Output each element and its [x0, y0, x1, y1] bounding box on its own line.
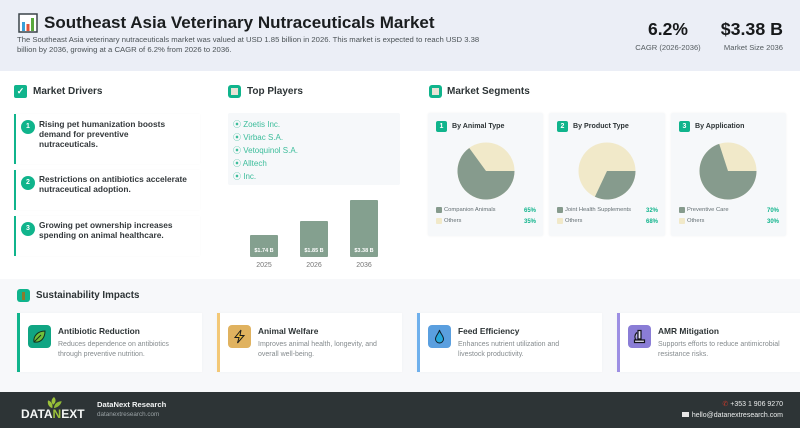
legend value: 32% [646, 208, 658, 214]
pie chart [700, 142, 756, 200]
footer [0, 392, 800, 428]
driver 1 text: Rising pet humanization boosts [39, 119, 165, 129]
panel: sustainability impacts [0, 279, 800, 392]
company name: DataNext Research [97, 400, 166, 409]
legend swatch [557, 207, 563, 213]
segment card: by application [671, 113, 786, 236]
player list [228, 113, 400, 185]
company website: datanextresearch.com [97, 411, 159, 418]
number 2 [21, 176, 35, 190]
header band [0, 0, 800, 71]
panel: market segments [429, 85, 530, 98]
segment card: by animal type [428, 113, 543, 236]
card text [658, 340, 780, 358]
panel: top players [228, 85, 400, 269]
card title: Antibiotic Reduction [58, 326, 140, 336]
number 3: 3 [26, 225, 30, 232]
panel: market drivers [14, 85, 187, 256]
driver 1 text: demand for preventive [39, 129, 128, 139]
card title: Animal Welfare [258, 326, 318, 336]
heading: top players: Top Players [247, 86, 303, 96]
badge 2 [557, 121, 568, 132]
badge 3: 3 [683, 123, 686, 130]
driver 3 text [39, 220, 173, 240]
legend label: Joint Health Supplements [565, 207, 631, 213]
number 2: 2 [26, 179, 30, 186]
legend value: 30% [767, 219, 779, 225]
card text: Supports efforts to reduce antimicrobial [658, 341, 780, 348]
driver 1 text [39, 119, 165, 149]
impact card: animal welfare [217, 313, 402, 372]
heading: sustainability impacts: Sustainability Impacts [36, 290, 139, 301]
stat: CAGR [635, 19, 701, 52]
legend swatch [679, 218, 685, 224]
segment card: by product type [549, 113, 665, 236]
heading: market segments: Market Segments [447, 86, 530, 96]
legend value: 35% [524, 219, 536, 225]
description [17, 35, 479, 54]
driver 2 text: Restrictions on antibiotics accelerate [39, 174, 187, 184]
icon: check [14, 85, 27, 98]
driver 2 [14, 170, 200, 210]
legend label: Others [444, 218, 461, 224]
bar 2025 [250, 235, 278, 257]
year 2025: 2025 [256, 262, 272, 269]
card title: AMR Mitigation [658, 326, 719, 336]
card text: livestock productivity. [458, 350, 524, 358]
bar 2026 [300, 221, 328, 257]
player: Inc.: ⦿ Inc. [233, 172, 256, 181]
stat: market size: $3.38 B [721, 19, 783, 39]
icon: seedling [17, 289, 30, 302]
driver 2 text: nutraceutical adoption. [39, 184, 131, 194]
legend value: 65% [524, 208, 536, 214]
driver 1 text: nutraceuticals. [39, 139, 98, 149]
impact card: antibiotic reduction [17, 313, 202, 372]
player: Vetoquinol: ⦿ Vetoquinol S.A. [233, 146, 298, 155]
title: Southeast Asia Veterinary Nutraceuticals Market [44, 13, 435, 32]
stat: CAGR: CAGR (2026-2036) [635, 43, 701, 52]
card title: By Animal Type [452, 122, 504, 130]
driver 3 [14, 216, 200, 256]
stat: market size: Market Size 2036 [724, 43, 783, 52]
bar chart [250, 200, 378, 269]
logo: DataNext [21, 397, 85, 421]
icon: water drop [428, 325, 451, 348]
year 2026: 2026 [306, 262, 322, 269]
number 1: 1 [26, 123, 30, 130]
logo wordmark: DATANEXT [21, 407, 85, 421]
impact card: feed efficiency [417, 313, 602, 372]
card text: resistance risks. [658, 350, 708, 358]
icon: microscope [628, 325, 651, 348]
number 1 [21, 120, 35, 134]
legend label: Others [565, 218, 582, 224]
legend swatch [436, 207, 442, 213]
stat: market size [721, 19, 783, 52]
legend value: 68% [646, 219, 658, 225]
description: billion by 2036, growing at a CAGR of 6.2% from 2026 to 2036. [17, 45, 232, 54]
description: The Southeast Asia veterinary nutraceuticals market was valued at USD 1.85 billion in 2026. This market is expected to reach USD 3.38 [17, 35, 479, 44]
heading: market drivers: Market Drivers [33, 86, 102, 96]
legend label: Preventive Care [687, 207, 729, 213]
legend swatch [679, 207, 685, 213]
icon: logo leaves [48, 397, 62, 408]
player: Virbac: ⦿ Virbac S.A. [233, 133, 283, 142]
card title: Feed Efficiency [458, 326, 519, 336]
player: Alltech: ⦿ Alltech [233, 159, 267, 168]
card text [58, 340, 169, 358]
pie chart [578, 142, 636, 200]
driver 3 text: spending on animal healthcare. [39, 230, 164, 240]
driver 3 text: Growing pet ownership increases [39, 220, 173, 230]
badge 2: 2 [561, 123, 564, 130]
bar 2026: $1.85 B [304, 248, 324, 254]
bar 2025: $1.74 B [254, 248, 274, 254]
legend label: Others [687, 218, 704, 224]
card text: Reduces dependence on antibiotics [58, 341, 169, 348]
legend value: 70% [767, 208, 779, 214]
contact: phone: ✆ +353 1 906 9270 [722, 401, 783, 408]
legend swatch [557, 218, 563, 224]
badge 1: 1 [440, 123, 443, 130]
card text: Improves animal health, longevity, and [258, 341, 377, 348]
badge 3 [679, 121, 690, 132]
badge 1 [436, 121, 447, 132]
icon: segments [429, 85, 442, 98]
contact: email: hello@datanextresearch.com [692, 412, 783, 419]
bar 2036: $3.38 B [354, 248, 374, 254]
stat: CAGR: 6.2% [648, 19, 688, 39]
card text [458, 340, 559, 358]
legend swatch [436, 218, 442, 224]
number 3 [21, 222, 35, 236]
driver 1 [14, 114, 200, 164]
icon: check: ✓ [17, 86, 24, 96]
bar 2036 [350, 200, 378, 257]
icon: lightning [228, 325, 251, 348]
card text: Enhances nutrient utilization and [458, 341, 559, 348]
pie chart [458, 142, 514, 200]
year 2036: 2036 [356, 262, 372, 269]
impact card: AMR mitigation [617, 313, 800, 372]
card text [258, 340, 377, 358]
card title: By Application [695, 122, 744, 130]
legend label: Companion Animals [444, 207, 496, 213]
icon: bar chart emoji [18, 13, 38, 33]
card text: through preventive nutrition. [58, 350, 145, 358]
player: Zoetis: ⦿ Zoetis Inc. [233, 120, 280, 129]
icon: top players [228, 85, 241, 98]
icon: leaf [28, 325, 51, 348]
card title: By Product Type [573, 122, 629, 130]
card text: overall well-being. [258, 350, 314, 358]
driver 2 text [39, 174, 187, 194]
